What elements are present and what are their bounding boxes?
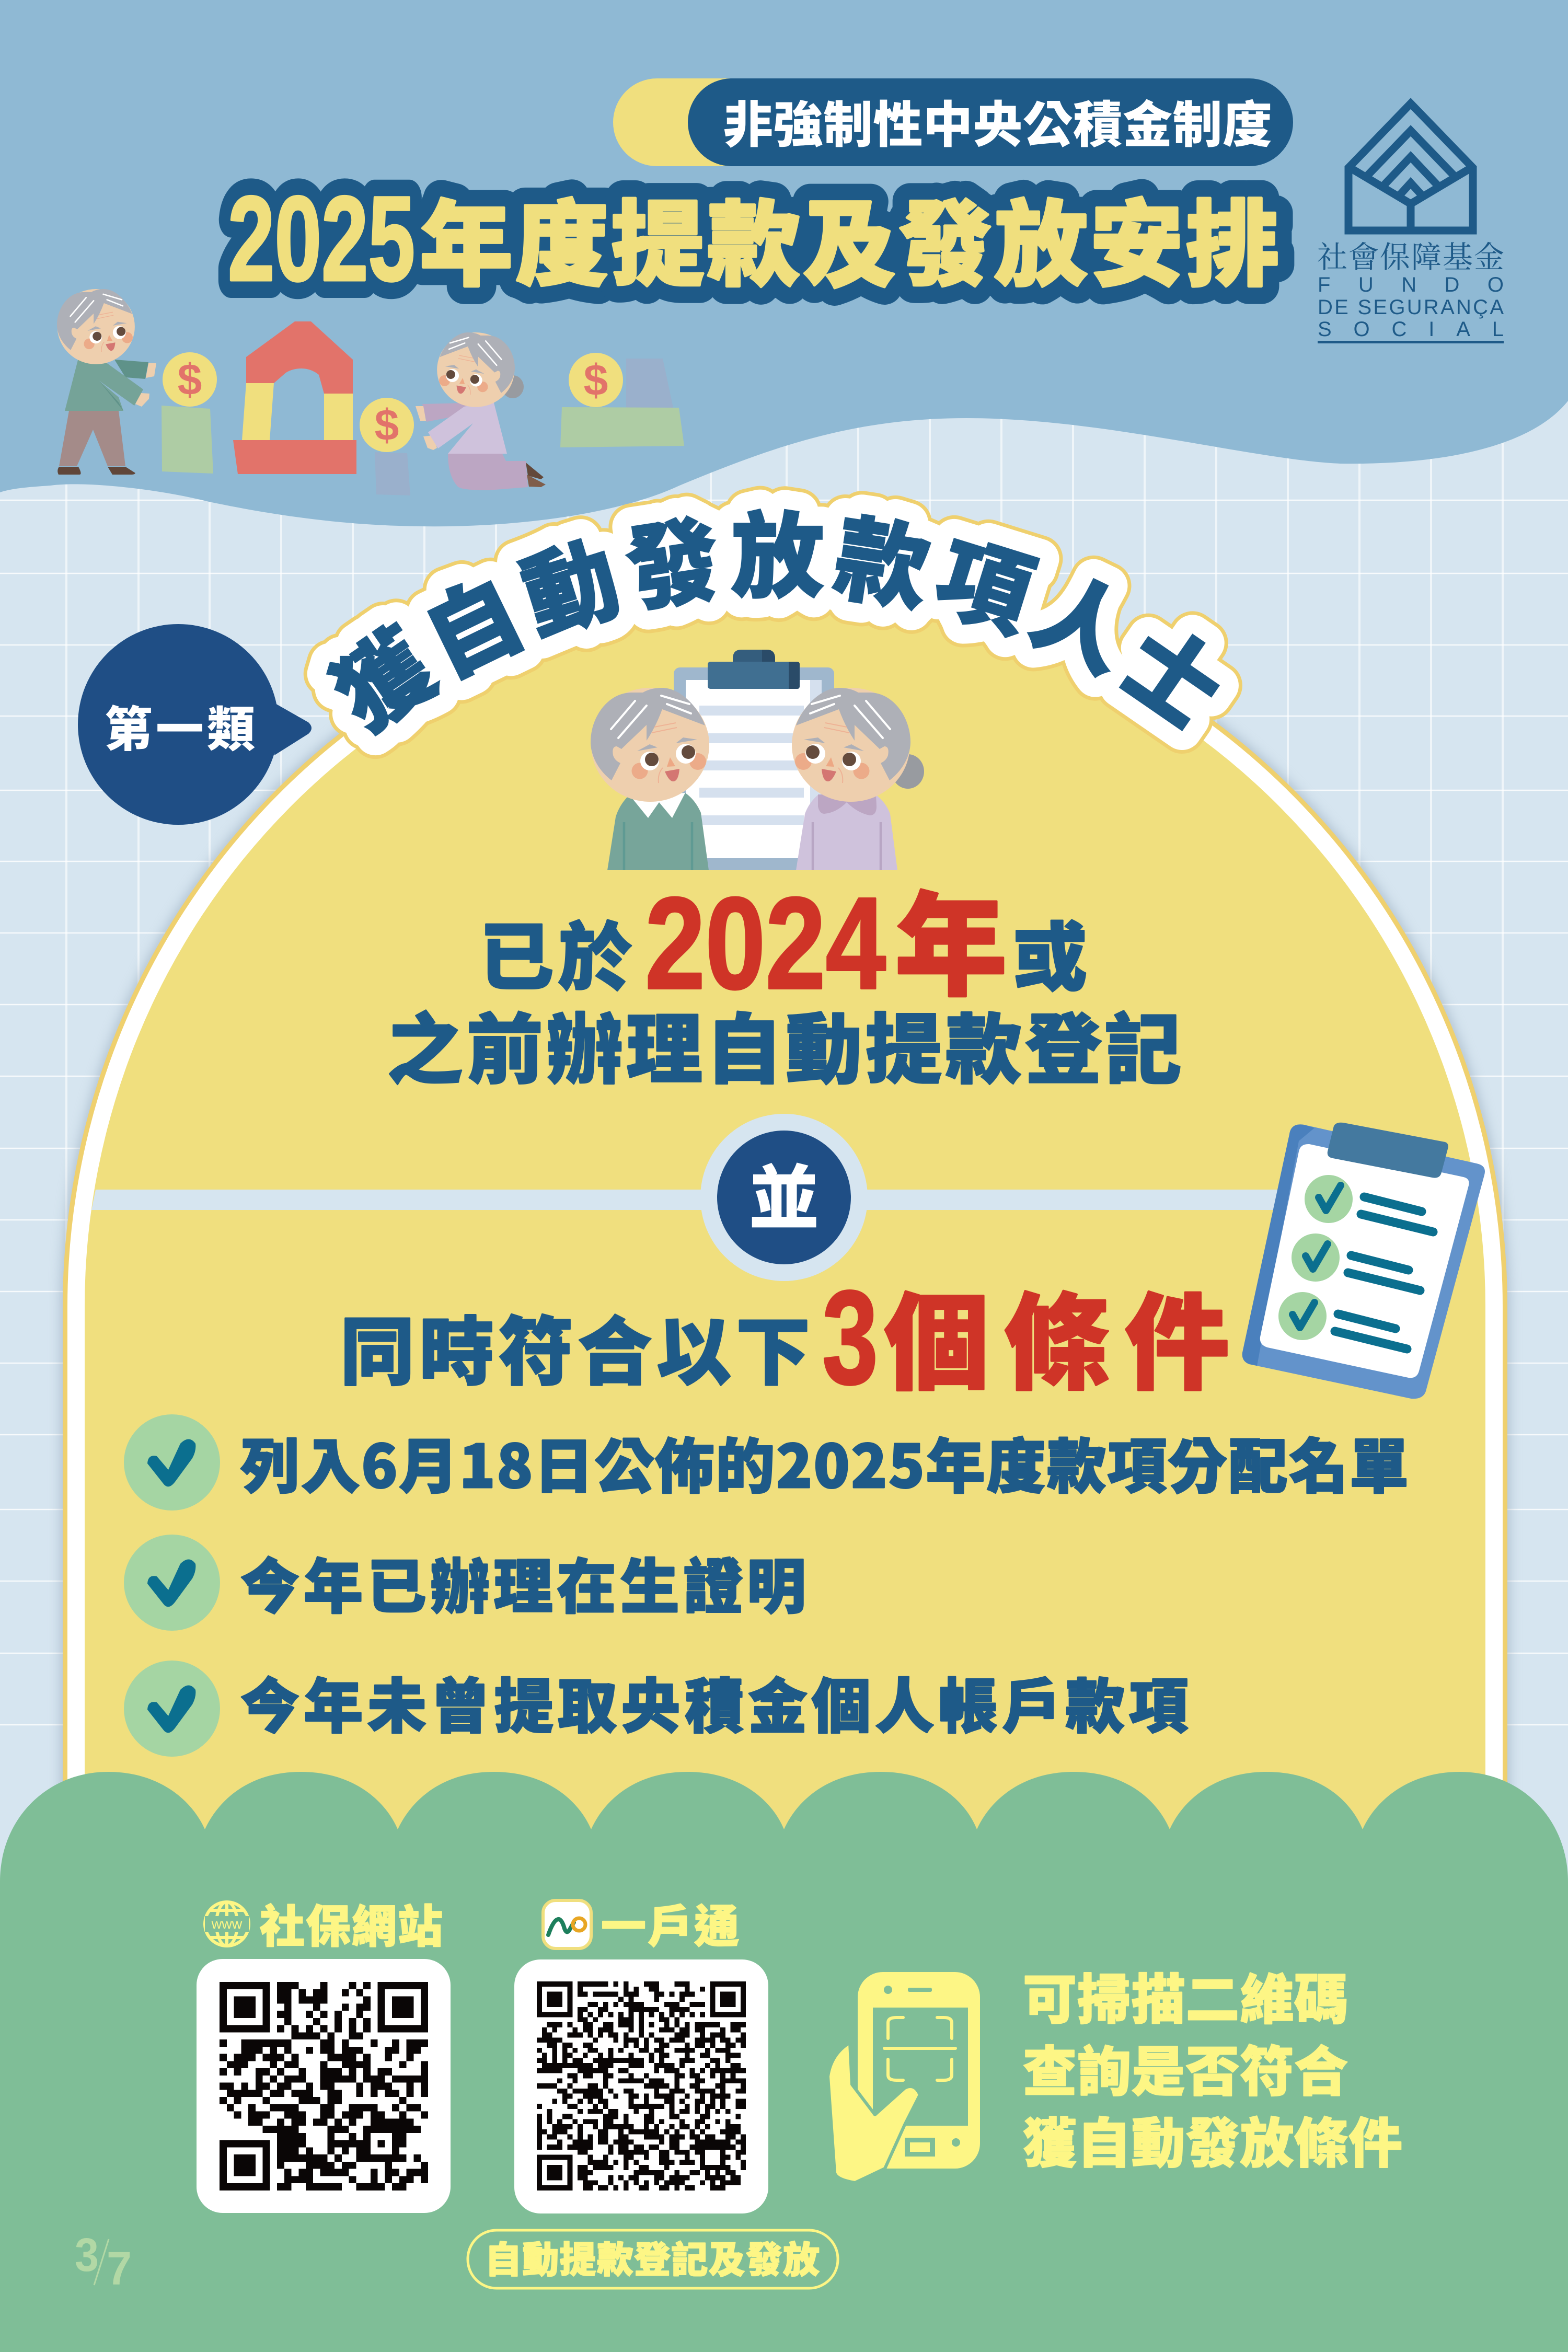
illustration: seniors with clipboard	[591, 650, 924, 870]
icon: globe	[205, 1902, 249, 1946]
coin	[360, 398, 414, 452]
text: registration condition: 年	[895, 856, 1007, 1018]
icon: checklist clipboard	[1242, 1123, 1485, 1399]
coin: $	[178, 355, 202, 404]
main title: 年度提款及發放安排	[420, 170, 1279, 305]
page number	[75, 2229, 132, 2295]
logo text: FUNDO	[1318, 273, 1504, 296]
panel: green footer	[0, 1772, 1568, 2352]
logo text: 社會保障基金	[1317, 233, 1504, 276]
icon: app	[543, 1900, 591, 1949]
block: right blue	[626, 359, 673, 408]
logo text: DE SEGURANÇA	[1318, 296, 1504, 319]
badge: category one	[78, 624, 312, 825]
badge: and	[700, 1114, 868, 1281]
logo mark	[1348, 103, 1473, 230]
text: scan instruction: 可掃描二維碼	[1023, 1956, 1348, 2034]
icon: hand holding phone	[828, 1972, 980, 2183]
text: registration condition: 已於	[479, 897, 632, 1005]
coin: $	[375, 400, 399, 449]
condition 1: 列入6月18日公佈的2025年度款項分配名單	[240, 1419, 1409, 1505]
illustration: seniors with coins and blocks	[57, 289, 684, 495]
text: scan instruction: 獲自動發放條件	[1023, 2100, 1402, 2178]
text: registration condition	[387, 856, 1181, 1099]
text: registration condition: 之前辦理自動提款登記	[387, 989, 1181, 1099]
badge: and: 並	[748, 1141, 820, 1243]
text: three conditions heading: 3	[822, 1263, 878, 1412]
text: three conditions heading: 個條件	[884, 1259, 1229, 1411]
woman	[792, 688, 924, 870]
main title: 年度提款及發放安排	[420, 170, 1279, 305]
divider	[91, 1190, 1295, 1210]
text: scan instruction	[1023, 1956, 1402, 2178]
panel: arch	[85, 601, 1485, 1855]
text: three conditions heading: 同時符合以下	[340, 1292, 810, 1400]
coin	[163, 352, 217, 407]
text: registration condition: 或	[1013, 897, 1087, 1005]
logo text: SOCIAL	[1318, 318, 1504, 341]
scan brackets	[884, 2017, 955, 2080]
header pill: 非強制性中央公積金制度	[723, 85, 1272, 157]
hand	[828, 2043, 920, 2183]
arched heading: 獲自動發放款項人士	[326, 508, 1220, 737]
block: green pillar	[162, 406, 213, 474]
arched heading: 獲自動發放款項人士	[307, 489, 1239, 756]
icon: globe: www	[211, 1916, 243, 1932]
condition 2: 今年已辦理在生證明	[240, 1539, 806, 1625]
page number: 3	[75, 2229, 99, 2281]
main title: 2025	[228, 171, 415, 306]
QR code: one account	[514, 1959, 768, 2213]
man	[591, 688, 709, 870]
arched heading: 獲自動發放款項人士	[303, 486, 1242, 759]
logo	[1317, 103, 1504, 343]
QR code: website	[197, 1959, 451, 2213]
header pill	[613, 78, 1293, 166]
app label: 一戶通	[601, 1890, 739, 1955]
logo text	[1317, 233, 1504, 343]
badge: category one: 第一類	[105, 691, 255, 760]
block: right green	[560, 407, 684, 447]
figure: woman kneeling	[416, 332, 546, 490]
page number: 7	[107, 2243, 132, 2295]
website label: 社保網站	[260, 1890, 443, 1955]
main title: 2025	[228, 171, 415, 306]
pill: registration label: 自動提款登記及發放	[485, 2231, 820, 2284]
phone body	[858, 1972, 980, 2169]
block: house	[233, 321, 356, 474]
figure: man pushing block	[57, 289, 156, 475]
top blue wave	[0, 0, 1568, 526]
coin	[569, 353, 623, 407]
text: three conditions heading	[340, 1259, 1229, 1412]
condition 3: 今年未曾提取央積金個人帳戶款項	[240, 1659, 1188, 1745]
condition list	[124, 1414, 1409, 1757]
block: small blue	[375, 452, 410, 495]
text: registration condition: 2024	[645, 870, 886, 1016]
text: scan instruction: 查詢是否符合	[1023, 2028, 1348, 2106]
clipboard	[674, 650, 834, 870]
coin: $	[584, 355, 608, 405]
